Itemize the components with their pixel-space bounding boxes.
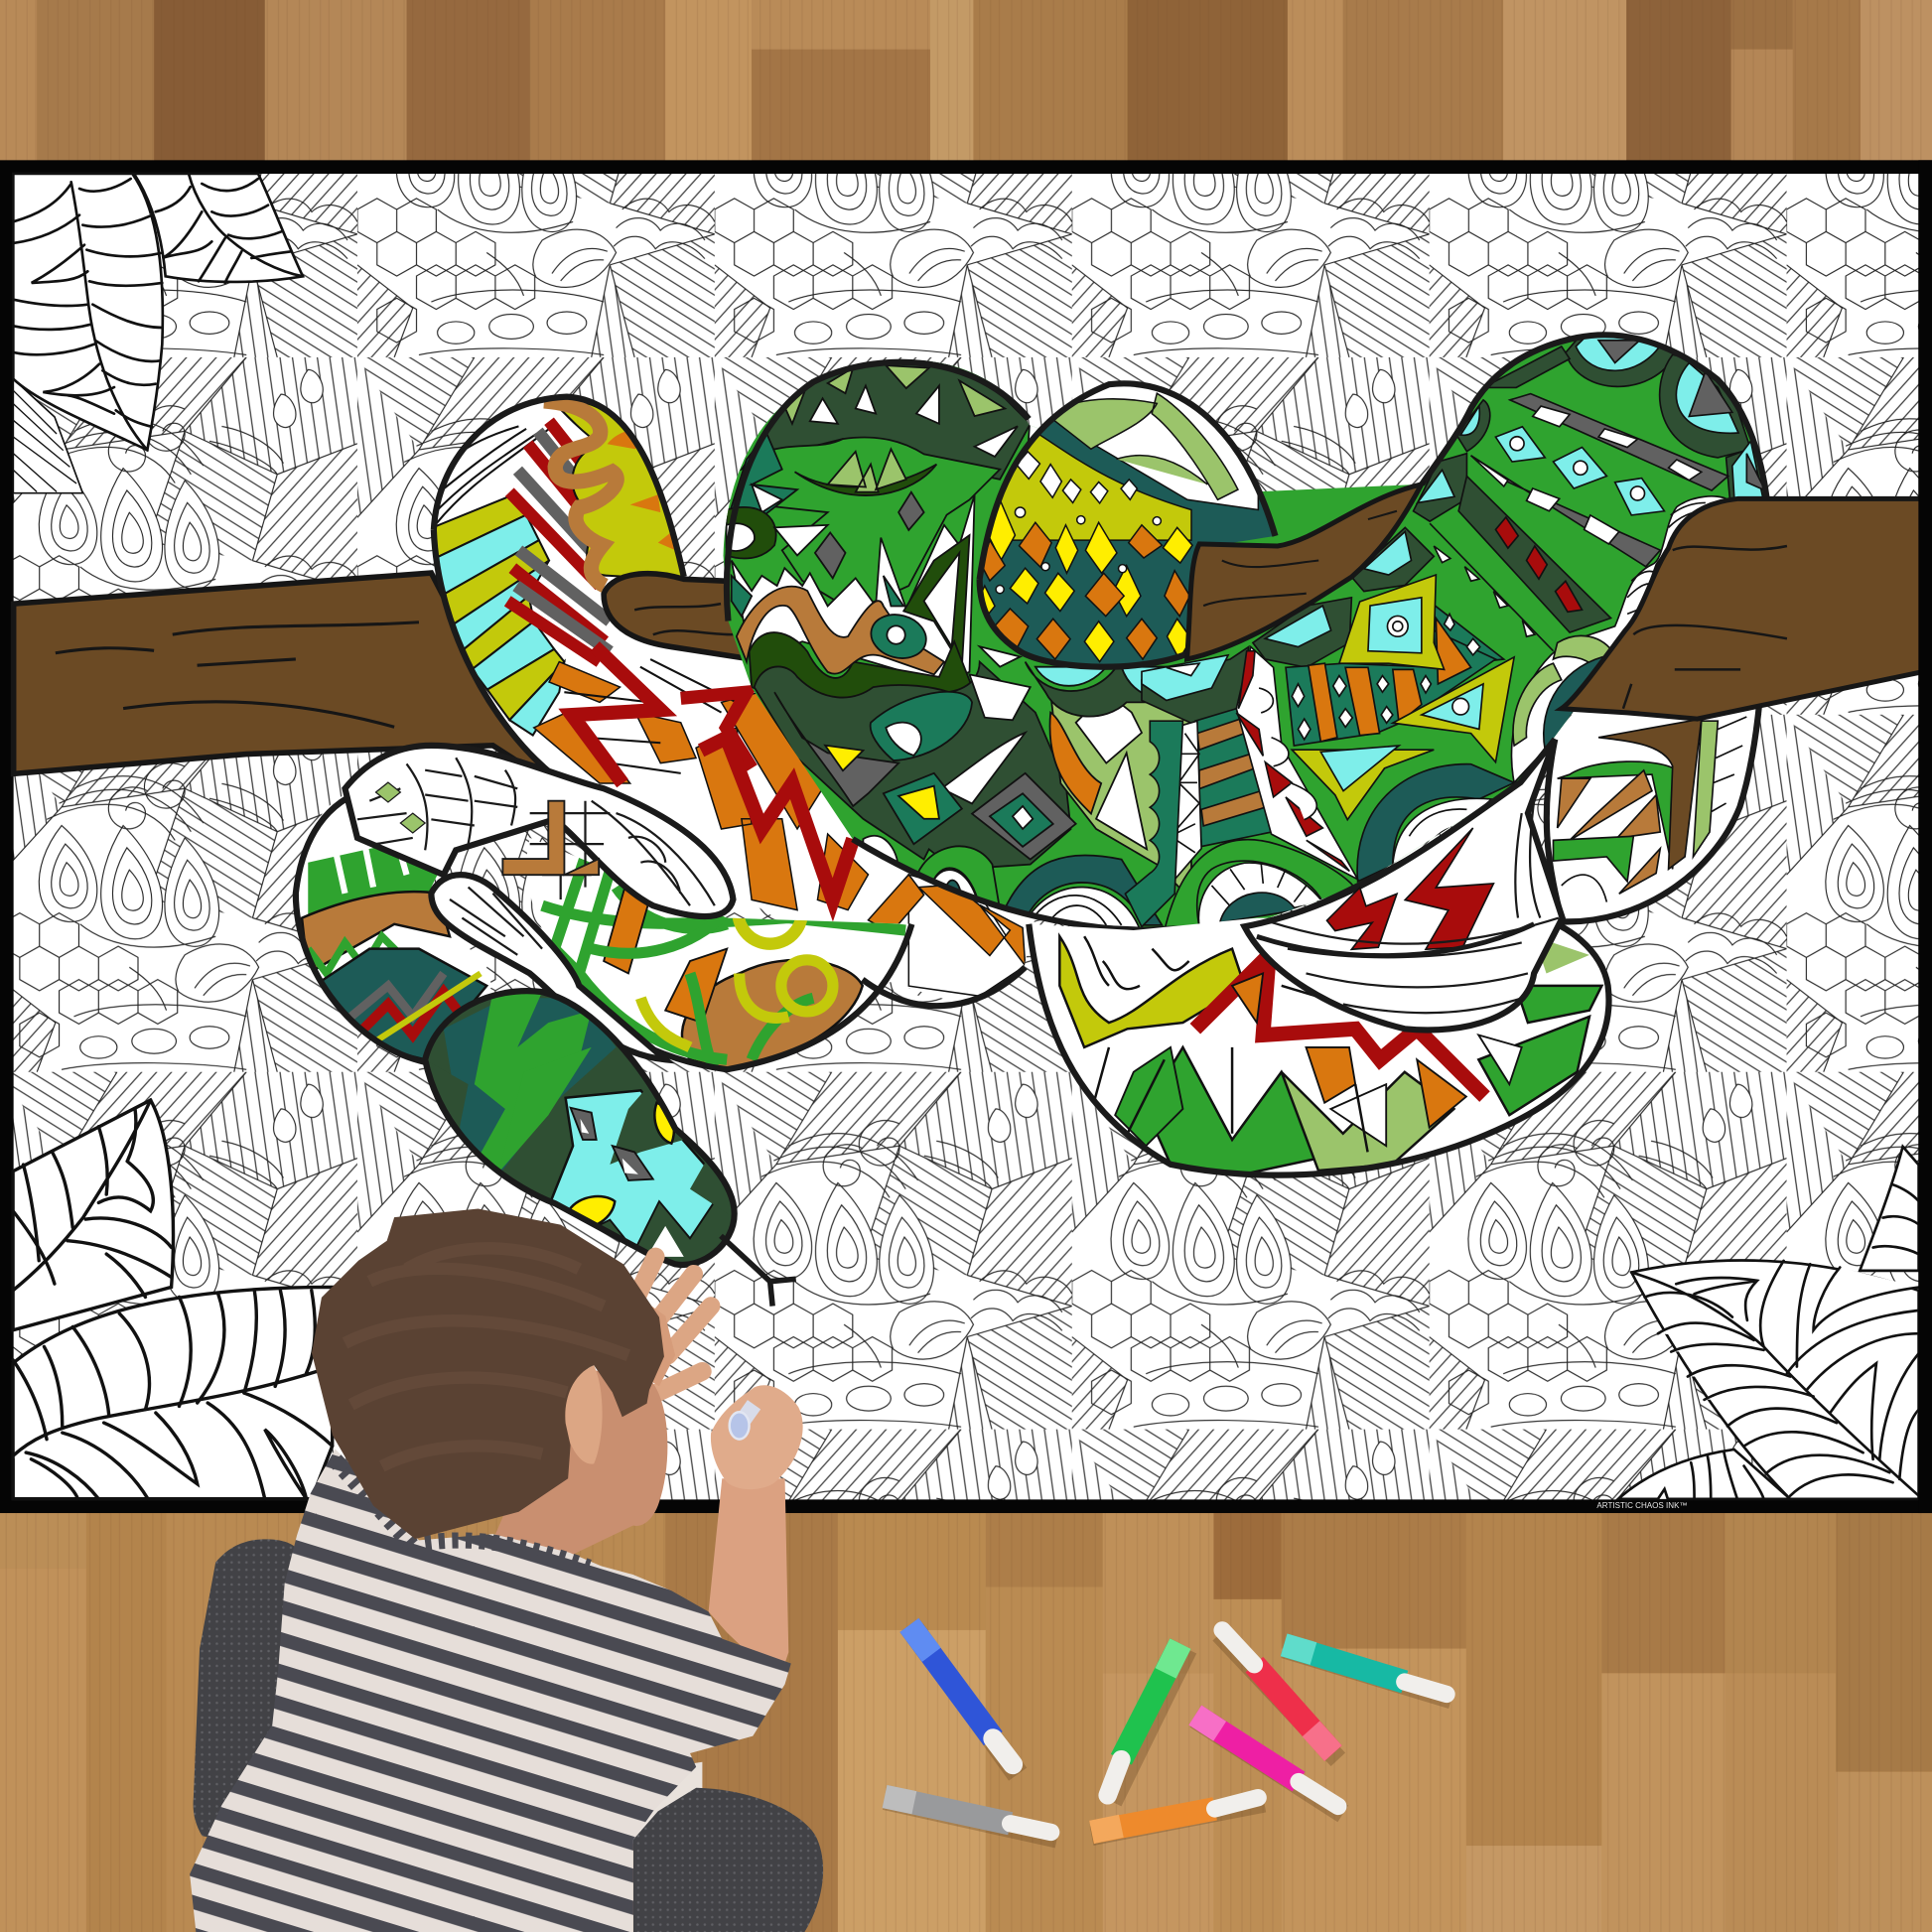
marker: orange	[1092, 1798, 1264, 1836]
boy: shirt collar	[336, 1460, 589, 1568]
snake outline: centre and right	[727, 335, 1767, 930]
teal scallops	[1125, 721, 1182, 926]
boy: striped shirt	[190, 1449, 791, 1932]
boy: ear	[565, 1365, 603, 1464]
boy: knee	[633, 1788, 823, 1932]
snake body: mosaic section	[973, 368, 1282, 678]
red triangle chain	[1236, 647, 1358, 880]
poster black frame	[0, 160, 1932, 1513]
top dark band	[742, 357, 1031, 480]
dark band with red diamonds	[1458, 477, 1611, 632]
left teal and white	[731, 435, 800, 514]
dark body	[755, 662, 1071, 870]
red zigzag	[572, 646, 660, 783]
copyright text: ARTISTIC CHAOS INK™	[1596, 1501, 1687, 1510]
olive star one	[1339, 575, 1445, 669]
centre body details	[727, 357, 1191, 927]
grey diamond	[972, 773, 1076, 860]
snake body: back loop under right branch	[1503, 690, 1762, 936]
boy: arm	[709, 1478, 788, 1682]
teal and orange stripes	[1286, 630, 1495, 746]
arches	[862, 834, 898, 862]
olive star three	[1292, 750, 1434, 820]
boy: foot	[194, 1539, 321, 1849]
leaves: bottom left corner	[13, 1100, 333, 1499]
eye motif	[795, 465, 936, 495]
snake tongue	[721, 1236, 796, 1307]
boy: hair	[312, 1208, 664, 1539]
wooden floor bottom	[0, 1513, 1932, 1932]
snake body: centre and right sections	[715, 327, 1787, 942]
white teeth	[732, 494, 975, 682]
white ray diamonds	[1434, 546, 1535, 655]
centre olive column	[1050, 692, 1191, 899]
snake outline: left striped coil	[296, 788, 425, 1062]
yellow diamond	[884, 773, 962, 844]
marker: red	[1220, 1630, 1338, 1759]
marker: teal	[1284, 1645, 1451, 1699]
boy: face and neck	[492, 1368, 667, 1555]
snake body: white finger coil	[345, 746, 733, 1059]
leaves: top left corner	[13, 174, 303, 493]
green arch	[1165, 840, 1358, 931]
grey stripe with yellow	[774, 692, 898, 806]
marker: blue	[909, 1625, 1018, 1774]
right white banded curl	[1511, 496, 1726, 782]
boy: hair strands	[345, 1248, 628, 1466]
snake outline: large bottom coil	[1029, 918, 1609, 1175]
snake eyes	[654, 1103, 674, 1144]
snake outline: rainbow coil	[434, 397, 684, 776]
teal arch	[1357, 764, 1514, 882]
top chain strip	[1510, 394, 1728, 490]
grey diamonds	[815, 492, 924, 578]
snake body: lower green and tan loop	[517, 826, 924, 1084]
boy colouring the poster	[190, 1208, 823, 1932]
snake head	[419, 980, 796, 1307]
white pockets	[970, 646, 1031, 720]
red lightning zigzags	[1327, 828, 1493, 949]
leaves: bottom right corner	[1618, 1147, 1919, 1499]
snake outline: mosaic section	[980, 383, 1276, 667]
boy: held marker	[730, 1405, 755, 1440]
yellow diamonds	[978, 499, 1192, 662]
branch: middle	[604, 574, 752, 659]
lower chain strip	[1471, 456, 1660, 567]
marker: grey	[885, 1796, 1057, 1839]
branch: left	[14, 573, 579, 801]
cyan snout	[551, 1090, 737, 1269]
boy: hand	[711, 1385, 803, 1489]
boy: raised hand fingers	[628, 1257, 711, 1395]
right body details	[1125, 335, 1771, 931]
poster doodle background	[14, 174, 1918, 1499]
snake outline: back loop	[1547, 702, 1759, 921]
boy: undershirt	[622, 1762, 702, 1849]
cyan eyes	[1495, 427, 1545, 462]
orange bands	[534, 662, 868, 910]
white cross band	[1163, 721, 1201, 894]
wooden floor top	[0, 0, 1932, 163]
upper white arcs	[435, 426, 549, 525]
mouth teeth	[586, 1182, 737, 1282]
snake body: left striped coil	[290, 776, 511, 1072]
orange diamonds	[982, 522, 1189, 659]
poster	[0, 160, 1932, 1513]
markers	[885, 1625, 1451, 1839]
olive field	[995, 429, 1191, 540]
snake body: white zigzag band	[1244, 740, 1563, 1030]
rainbow stripes	[433, 494, 564, 736]
branch: right short limb	[1187, 484, 1422, 659]
branch: right main limb	[1562, 498, 1924, 719]
top rings	[1566, 340, 1672, 387]
tan wave	[737, 587, 944, 674]
snake body: rainbow coil	[434, 399, 1035, 1000]
red and grey stripes	[507, 414, 620, 662]
snake body: large bottom coil	[1023, 911, 1614, 1195]
olive star two	[1393, 657, 1514, 762]
snake outline: lower green loop	[573, 924, 1026, 1069]
wavy olive and tan	[560, 403, 681, 578]
dark green under tan	[749, 631, 971, 697]
marker: green	[1108, 1644, 1186, 1801]
marker: magenta	[1195, 1716, 1343, 1814]
dark rim under mosaic	[1025, 661, 1168, 717]
head diamonds	[571, 1108, 653, 1180]
green white stripes top	[1005, 368, 1258, 510]
rims with cyan	[1142, 647, 1249, 723]
striped column	[1195, 709, 1272, 847]
teal swirl	[871, 692, 972, 760]
